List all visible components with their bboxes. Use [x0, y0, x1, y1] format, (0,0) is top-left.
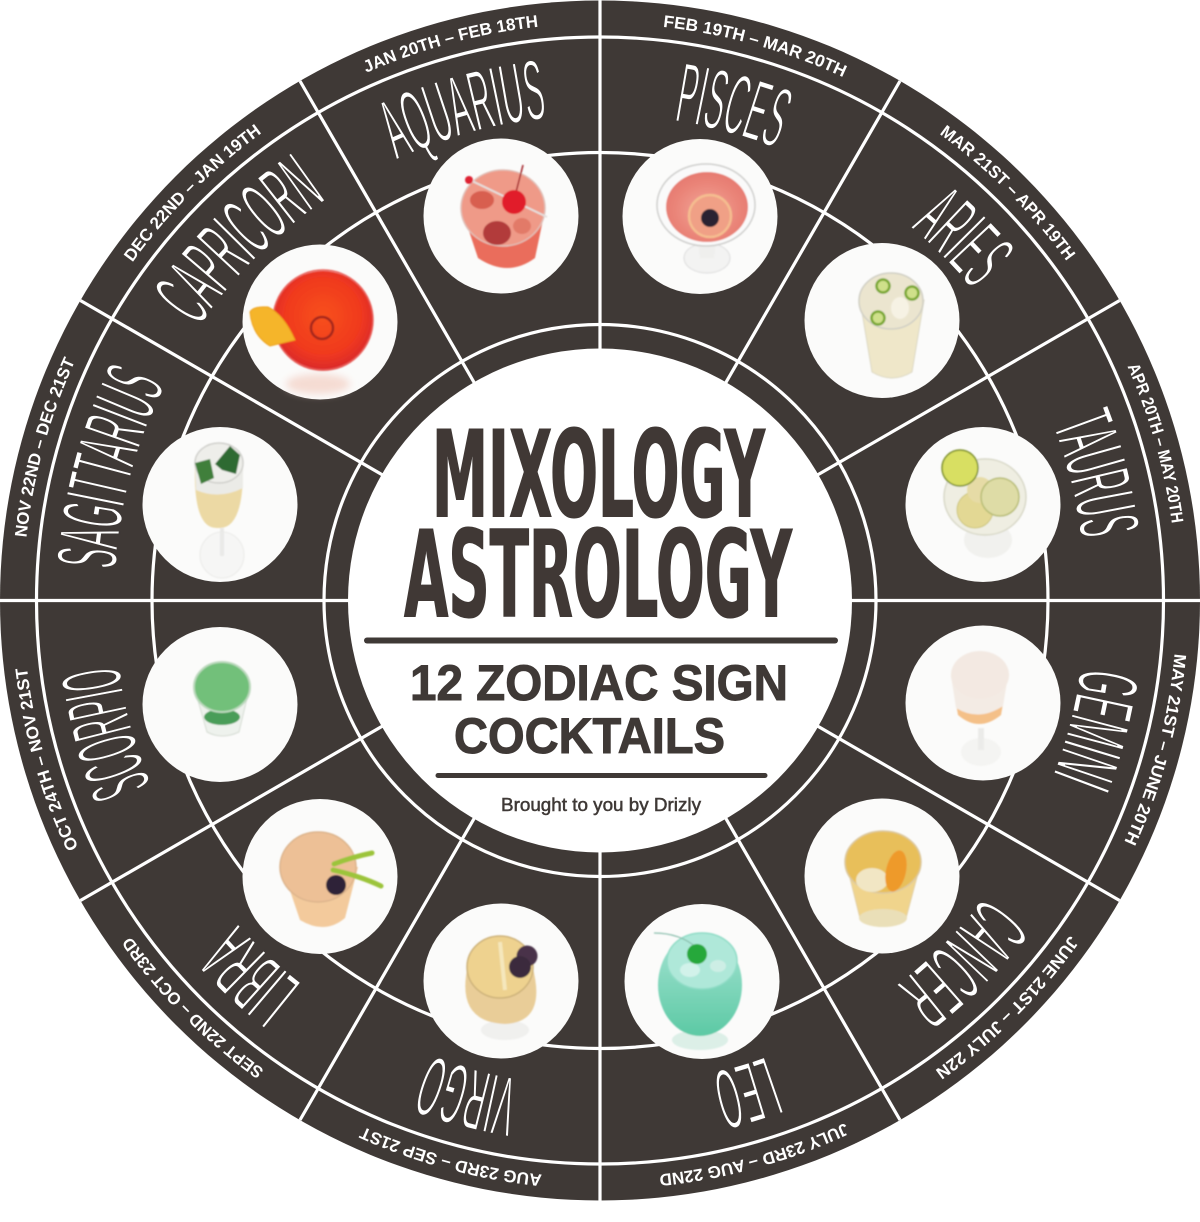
dates: Scorpio: OCT 24TH – NOV 21ST: [15, 668, 76, 850]
sign: Virgo: VIRGO: [418, 1058, 511, 1136]
icon: Sagittarius cocktail: [142, 427, 298, 582]
dates: Gemini: MAY 21ST – JUNE 20TH: [1124, 654, 1186, 846]
credit line: Brought to you by Drizly: [501, 795, 701, 815]
icon: Gemini cocktail: [906, 626, 1060, 780]
dates: Aquarius: JAN 20TH – FEB 18TH: [364, 15, 538, 72]
subtitle: 12 ZODIAC SIGN: [410, 655, 788, 711]
title: MIXOLOGY: [432, 405, 766, 546]
dates: Leo: JULY 23RD – AUG 22ND: [660, 1124, 847, 1186]
sign: Gemini: GEMINI: [1054, 672, 1137, 793]
icon: Aquarius cocktail: [424, 138, 578, 294]
title: ASTROLOGY: [404, 505, 793, 646]
sign: Capricorn: CAPRICORN: [156, 154, 324, 320]
icon: Capricorn cocktail: [242, 244, 398, 400]
sign: Cancer: CANCER: [898, 903, 1025, 1026]
dates: Sagittarius: NOV 22ND – DEC 21ST: [14, 356, 74, 536]
sign: Taurus: TAURUS: [1056, 406, 1138, 536]
sign: Aquarius: AQUARIUS: [382, 61, 544, 160]
subtitle divider: [438, 773, 765, 778]
icon: Cancer cocktail: [804, 798, 960, 954]
icon: Pisces cocktail: [622, 139, 778, 294]
icon: Leo cocktail: [624, 904, 780, 1059]
sign: Leo: LEO: [716, 1058, 782, 1128]
sign: Scorpio: SCORPIO: [62, 670, 148, 801]
title divider: [367, 638, 835, 644]
dates: Cancer: JUNE 21ST – JULY 22N: [936, 936, 1078, 1080]
dates: Aries: MAR 21ST – APR 19TH: [940, 125, 1076, 260]
subtitle: [410, 655, 788, 764]
sign: Libra: LIBRA: [202, 925, 300, 1028]
title: [404, 405, 793, 646]
sign: Aries: ARIES: [912, 190, 1012, 285]
dates: Libra: SEPT 22ND – OCT 23RD: [124, 938, 263, 1078]
center white circle: [348, 348, 852, 852]
dates: Pisces: FEB 19TH – MAR 20TH: [664, 15, 847, 77]
icon: Virgo cocktail: [424, 904, 578, 1058]
icon: Aries cocktail: [804, 243, 960, 398]
sign: Sagittarius: SAGITTARIUS: [58, 365, 162, 567]
icon: Taurus cocktail: [906, 427, 1060, 582]
icon: Scorpio cocktail: [142, 627, 298, 782]
dates: Taurus: APR 20TH – MAY 20TH: [1128, 366, 1184, 523]
icon: Libra cocktail: [242, 799, 398, 954]
subtitle: COCKTAILS: [454, 708, 725, 764]
dates: Virgo: AUG 23RD – SEP 21ST: [358, 1128, 542, 1186]
dates: Capricorn: DEC 22ND – JAN 19TH: [124, 124, 261, 262]
sign: Pisces: PISCES: [676, 64, 792, 146]
